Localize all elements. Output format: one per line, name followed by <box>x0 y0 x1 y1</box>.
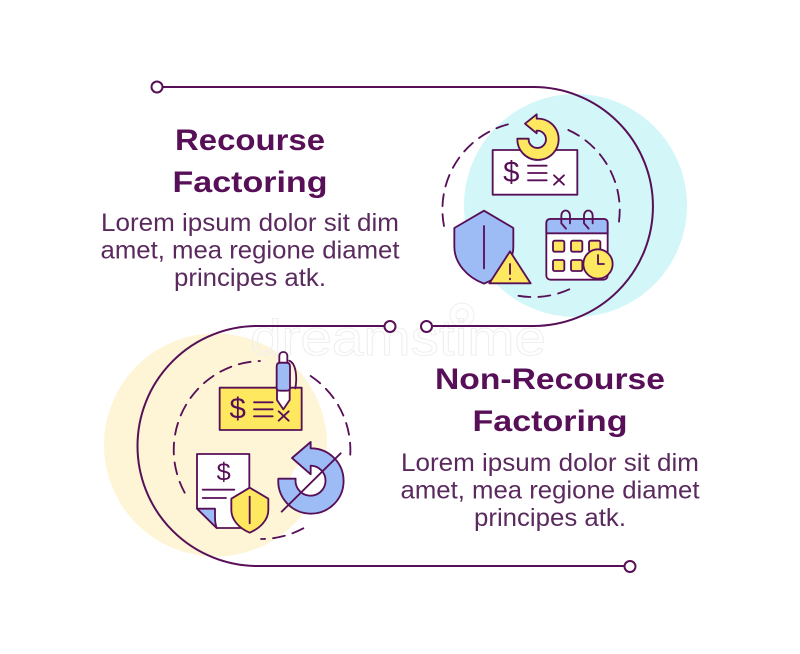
text block: Non-Recourse Factoring description <box>400 449 700 532</box>
background circle: top (cyan) <box>464 94 687 317</box>
text block: Recourse Factoring description <box>100 209 400 292</box>
dashed ring <box>174 361 350 539</box>
heading: Non-Recourse Factoring <box>435 363 665 438</box>
icon: signed cheque: $ <box>230 392 246 425</box>
background circle: bottom (yellow) <box>104 334 327 556</box>
icon: document with shield <box>197 454 268 533</box>
heading: Recourse Factoring: Factoring <box>172 166 328 199</box>
icon: shield <box>454 211 513 284</box>
icon group: recourse factoring <box>442 114 620 297</box>
text block: Non-Recourse Factoring description: principes atk. <box>474 504 626 532</box>
heading: Non-Recourse Factoring: Factoring <box>472 405 628 438</box>
text block: Non-Recourse Factoring description: Lorem ipsum dolor sit dim <box>401 449 699 477</box>
icon: warning triangle <box>489 251 531 283</box>
connector line: top <box>152 82 653 332</box>
heading: Recourse Factoring: Recourse <box>175 124 325 157</box>
text block: Recourse Factoring description: principes atk. <box>174 264 326 292</box>
icon: return arrow <box>517 114 559 160</box>
text block: Recourse Factoring description: Lorem ipsum dolor sit dim <box>101 209 399 237</box>
icon: document with shield: $ <box>217 458 231 486</box>
heading: Recourse Factoring <box>172 124 328 199</box>
icon: pen <box>277 352 296 409</box>
icon: crossed-out return arrow <box>278 442 344 514</box>
dashed ring <box>442 124 620 297</box>
watermark: dreamstime <box>250 310 546 366</box>
icon: calendar with clock <box>546 210 613 280</box>
icon group: non-recourse factoring <box>174 352 350 539</box>
heading: Non-Recourse Factoring: Non-Recourse <box>435 363 665 396</box>
icon: cheque: $ <box>503 156 519 189</box>
text block: Recourse Factoring description: amet, mea regione diamet <box>100 236 400 264</box>
icon: signed cheque <box>220 388 302 430</box>
connector line: bottom <box>138 321 636 572</box>
text block: Non-Recourse Factoring description: amet, mea regione diamet <box>400 476 700 504</box>
icon: cheque <box>493 150 577 195</box>
